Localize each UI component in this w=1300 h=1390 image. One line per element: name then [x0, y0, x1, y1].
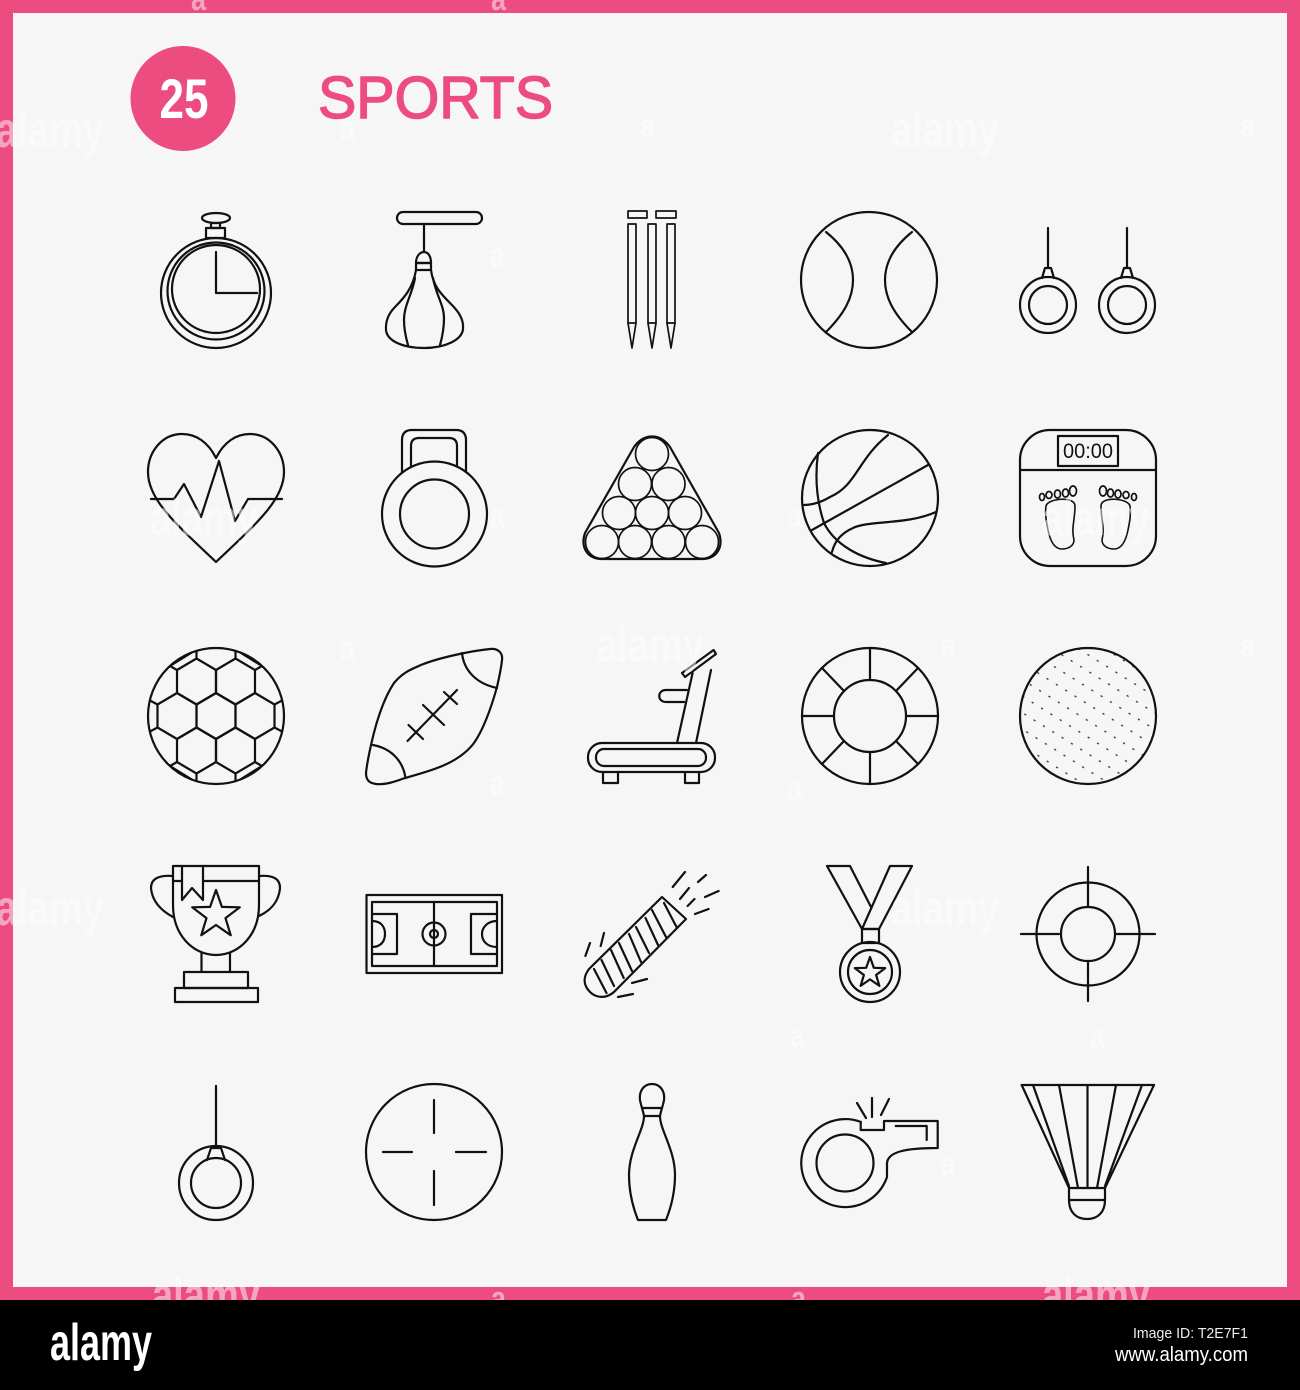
- icon: heart rate: [148, 434, 284, 562]
- watermark overlay: a: [340, 630, 356, 668]
- icon: punching bag: [386, 212, 482, 348]
- watermark overlay: a: [490, 765, 506, 803]
- watermark overlay: alamy: [0, 880, 104, 936]
- icon: football field: [366, 895, 502, 973]
- icon: medal: [827, 866, 912, 1002]
- icon: party cracker: [585, 872, 719, 997]
- watermark overlay: a: [787, 497, 803, 535]
- icon: gym ring single: [179, 1086, 253, 1220]
- icon: bowling pin: [629, 1084, 675, 1220]
- watermark overlay: a: [340, 110, 356, 148]
- watermark overlay: alamy: [891, 102, 999, 158]
- icon: bathroom scale: [1020, 430, 1156, 566]
- icon: cricket stumps: [628, 211, 676, 348]
- watermark overlay: a: [790, 1017, 806, 1055]
- footer logo: alamy: [50, 1314, 152, 1372]
- watermark overlay: alamy: [596, 617, 704, 673]
- watermark overlay: a: [787, 770, 803, 808]
- watermark overlay: a: [1240, 107, 1256, 145]
- watermark overlay: a: [490, 497, 506, 535]
- count badge: 25: [160, 67, 208, 130]
- icon: trophy: [151, 866, 280, 1002]
- icon: bathroom scale: 00:00: [1063, 440, 1113, 463]
- watermark overlay: a: [1090, 1017, 1106, 1055]
- watermark overlay: alamy: [1042, 1267, 1150, 1323]
- icon: basketball: [802, 430, 938, 566]
- website: www.alamy.com: [1114, 1344, 1248, 1366]
- icon: soccer ball: [148, 648, 284, 784]
- icon: treadmill: [588, 650, 716, 783]
- watermark overlay: a: [490, 237, 506, 275]
- footer bar: [0, 1300, 1300, 1390]
- watermark overlay: a: [940, 627, 956, 665]
- icon: whistle: [801, 1098, 938, 1207]
- watermark overlay: alamy: [891, 880, 999, 936]
- icon: american football: [366, 649, 502, 784]
- icon: stopwatch: [161, 213, 271, 348]
- watermark overlay: alamy: [150, 490, 258, 546]
- title: SPORTS: [318, 65, 553, 131]
- watermark overlay: a: [1240, 627, 1256, 665]
- icon: target: [1021, 867, 1155, 1001]
- watermark overlay: a: [491, 1280, 507, 1318]
- icon: billiard rack: [584, 436, 720, 559]
- watermark overlay: alamy: [1042, 490, 1150, 546]
- icon: gym rings pair: [1020, 228, 1155, 333]
- image id: Image ID: T2E7F1: [1133, 1325, 1248, 1342]
- watermark overlay: alamy: [152, 1267, 260, 1323]
- watermark overlay: alamy: [0, 102, 104, 158]
- icon: kettlebell: [382, 430, 487, 566]
- count badge: [130, 46, 236, 151]
- watermark overlay: a: [640, 107, 656, 145]
- icon: dotted ball: [1020, 648, 1156, 784]
- watermark overlay: a: [940, 1145, 956, 1183]
- icon: crosshair circle: [366, 1084, 502, 1220]
- icon: shuttlecock: [1022, 1085, 1154, 1219]
- icon: tennis ball: [801, 212, 937, 348]
- icon: swim ring: [802, 648, 938, 784]
- watermark overlay: a: [791, 1280, 807, 1318]
